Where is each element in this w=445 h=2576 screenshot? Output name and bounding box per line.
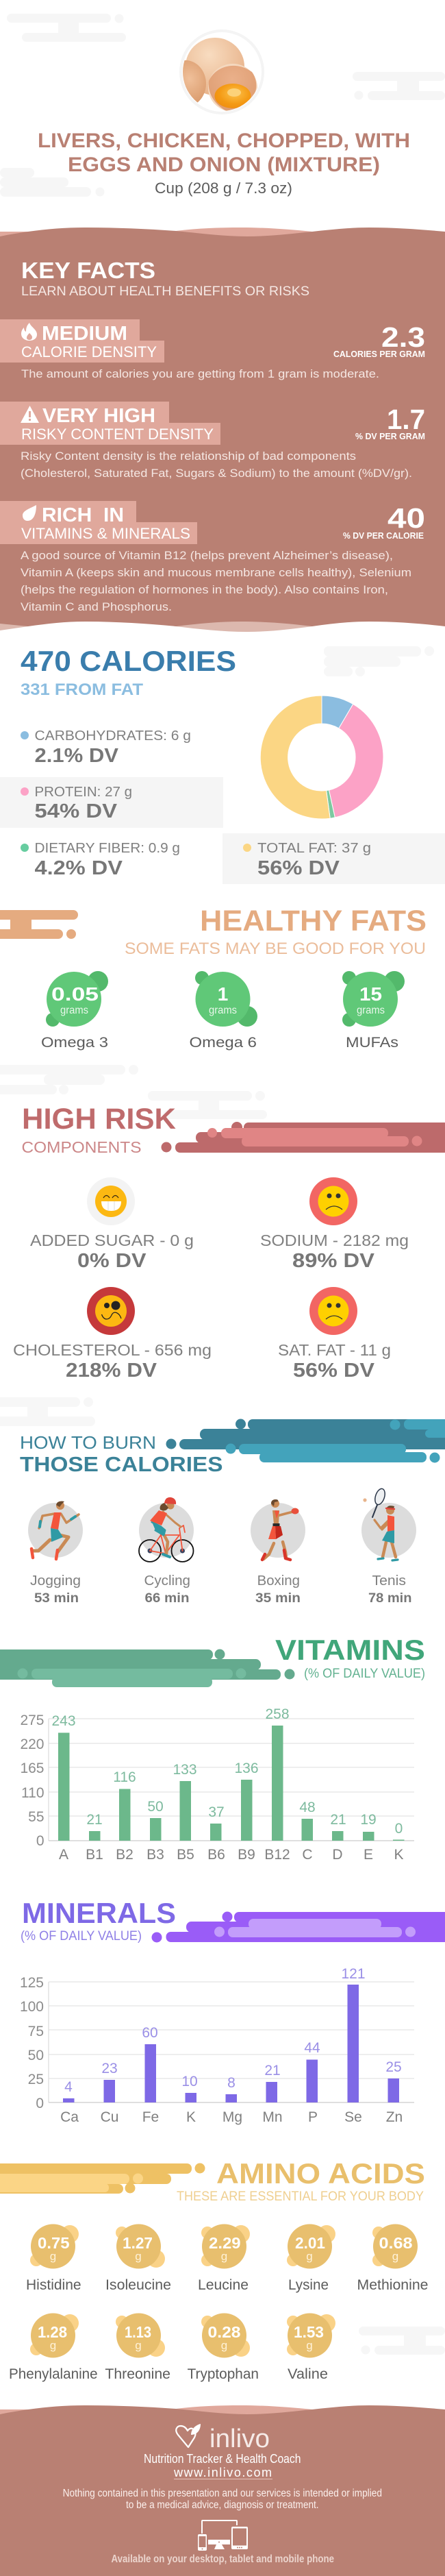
value labels: 136	[234, 1761, 259, 1776]
sub heading: THESE ARE ESSENTIAL FOR YOUR BODY	[177, 2189, 424, 2204]
banner shape	[162, 1122, 445, 1153]
y axis labels: 220	[20, 1737, 44, 1752]
logo: heart and leaf	[176, 2424, 201, 2447]
disclaimer	[63, 2488, 382, 2511]
fact: risky content density: % DV PER GRAM	[355, 432, 425, 441]
infographic canvas: 78 min	[368, 1591, 412, 1606]
value labels: 21	[86, 1812, 103, 1828]
y axis labels: 0	[36, 1833, 44, 1849]
value labels: 23	[101, 2061, 118, 2076]
disclaimer: to be a medical advice, diagnosis or treatment.	[126, 2499, 319, 2511]
bubble: phenylalanine	[9, 2314, 98, 2382]
heading: MINERALS	[22, 1897, 176, 1929]
icon: cyclist	[139, 1497, 193, 1562]
fact: vitamins and minerals: Vitamin A (keeps skin and mucous membrane cells healthy), Selenium	[21, 567, 411, 579]
activity: tennis	[361, 1488, 416, 1560]
heading	[20, 1432, 223, 1476]
bubble: tryptophan: Tryptophan	[188, 2366, 259, 2382]
infographic canvas: Boxing	[257, 1573, 300, 1588]
fact: vitamins and minerals: 40	[387, 502, 425, 534]
fact: calorie density: MEDIUM	[42, 323, 127, 345]
value labels: 50	[147, 1799, 164, 1815]
sub heading: 331 FROM FAT	[21, 680, 143, 699]
bubble: threonine	[105, 2314, 170, 2382]
value labels: 25	[385, 2059, 402, 2075]
panel: healthy fats	[0, 905, 427, 1119]
x axis labels: D	[332, 1847, 343, 1863]
tagline: Nutrition Tracker & Health Coach	[144, 2452, 301, 2466]
y axis labels: 125	[20, 1975, 44, 1991]
infographic canvas: 35 min	[255, 1591, 301, 1606]
bar chart: minerals	[20, 1966, 414, 2125]
item: cholesterol: CHOLESTEROL - 656 mg	[13, 1341, 212, 1359]
x axis labels: B1	[86, 1847, 103, 1863]
item: saturated fat	[278, 1287, 391, 1382]
bubble: leucine	[198, 2224, 250, 2293]
panel: high risk	[13, 1103, 445, 1382]
bubble: omega 6: Omega 6	[189, 1035, 257, 1051]
gridlines	[49, 1719, 414, 1841]
bubble: histidine: g	[50, 2250, 56, 2263]
value labels: 116	[113, 1769, 136, 1785]
item: sodium	[260, 1177, 409, 1272]
x axis labels	[59, 1847, 404, 1863]
item: added sugar: ADDED SUGAR - 0 g	[30, 1231, 194, 1249]
item: sodium: SODIUM - 2182 mg	[260, 1231, 409, 1249]
panel: header	[0, 14, 445, 197]
item: saturated fat: 56% DV	[293, 1360, 375, 1382]
fact: calorie density: CALORIES PER GRAM	[333, 349, 425, 359]
bubble: MUFAs: MUFAs	[346, 1035, 398, 1051]
item: added sugar	[30, 1177, 194, 1272]
fact: calorie density: 2.3	[381, 321, 425, 353]
donut chart	[260, 696, 383, 819]
background cloud	[324, 646, 434, 676]
value labels: 48	[299, 1800, 316, 1815]
fact: vitamins and minerals: % DV PER CALORIE	[343, 531, 424, 541]
x axis labels: B12	[264, 1847, 290, 1863]
disclaimer: Nothing contained in this presentation and our services is intended or implied	[63, 2488, 382, 2499]
value labels	[64, 1966, 402, 2095]
legend: carbohydrates: CARBOHYDRATES: 6 g	[34, 728, 191, 744]
panel: amino acids	[0, 2157, 445, 2382]
bubble: histidine	[26, 2224, 81, 2293]
icon: sad face	[318, 1186, 349, 1217]
panel: vitamins	[0, 1634, 425, 1863]
x axis labels: Cu	[101, 2109, 118, 2125]
panel: key facts	[0, 228, 445, 632]
fact: risky content density	[0, 402, 425, 480]
x axis labels: Ca	[60, 2109, 79, 2125]
title	[38, 130, 410, 176]
value labels: 4	[64, 2079, 73, 2095]
bubble: lysine	[287, 2224, 335, 2293]
item: added sugar: 0% DV	[77, 1250, 147, 1272]
heading: KEY FACTS	[21, 258, 155, 283]
activity: jogging	[28, 1501, 83, 1559]
panel: burn calories: Jogging	[30, 1573, 81, 1588]
infographic canvas: Tenis	[372, 1573, 406, 1588]
bars	[63, 1985, 399, 2102]
heading: VITAMINS	[275, 1634, 425, 1666]
bubble: phenylalanine: Phenylalanine	[9, 2366, 98, 2382]
fact: vitamins and minerals: VITAMINS & MINERALS	[21, 525, 190, 542]
legend: dietary fiber: DIETARY FIBER: 0.9 g	[34, 841, 180, 856]
icon: warning triangle	[21, 406, 39, 423]
value labels: 37	[208, 1804, 225, 1820]
infographic canvas: Cycling	[144, 1573, 190, 1588]
heading: 470 CALORIES	[21, 645, 236, 677]
bubble: omega 3	[41, 971, 108, 1051]
icon: devices	[198, 2520, 248, 2551]
bubble: threonine: g	[135, 2339, 142, 2352]
value labels: 0	[395, 1821, 403, 1837]
legend: carbohydrates: 2.1% DV	[34, 745, 119, 767]
bubble: phenylalanine: g	[50, 2339, 56, 2352]
bubble: lysine: 2.01	[295, 2234, 325, 2252]
fact: risky content density: 1.7	[387, 404, 425, 435]
legend: dietary fiber: 4.2% DV	[34, 857, 123, 879]
fact: vitamins and minerals: RICH IN	[42, 504, 124, 526]
x axis labels: Zn	[386, 2109, 403, 2125]
heading: HOW TO BURN	[20, 1432, 156, 1453]
bubble: leucine: 2.29	[209, 2234, 241, 2252]
icon: leaf	[23, 505, 36, 521]
value labels	[51, 1706, 403, 1837]
heading: LEARN ABOUT HEALTH BENEFITS OR RISKS	[21, 284, 309, 299]
banner shape	[0, 910, 78, 939]
x axis labels: B9	[238, 1847, 255, 1863]
legend: protein	[21, 785, 132, 822]
bubble: omega 3: Omega 3	[41, 1035, 108, 1051]
availability note: Available on your desktop, tablet and mobile phone	[111, 2553, 334, 2565]
wave edge	[0, 2405, 445, 2576]
activity: cycling	[139, 1497, 194, 1562]
bubble: tryptophan: g	[221, 2339, 227, 2352]
y axis labels: 25	[28, 2072, 44, 2087]
banner shape	[166, 1419, 445, 1462]
legend: total fat: TOTAL FAT: 37 g	[257, 841, 371, 856]
x axis labels: Mn	[262, 2109, 283, 2125]
bubble: omega 6	[189, 971, 257, 1051]
legend highlight boxes	[0, 777, 445, 884]
legend: total fat	[243, 841, 371, 879]
y axis labels: 50	[28, 2048, 44, 2063]
legend: protein: 54% DV	[34, 800, 118, 822]
bubble: tryptophan	[188, 2314, 259, 2382]
value labels: 10	[181, 2074, 198, 2089]
bubble: MUFAs: 15	[359, 983, 382, 1005]
bars	[58, 1726, 404, 1841]
x axis labels: Fe	[142, 2109, 159, 2125]
legend: total fat: 56% DV	[257, 857, 340, 879]
fact: risky content density: VERY HIGH	[42, 405, 155, 427]
x axis labels: Se	[344, 2109, 362, 2125]
y axis labels: 275	[20, 1713, 44, 1728]
y axis labels: 100	[20, 1999, 44, 2015]
infographic canvas: 66 min	[145, 1591, 189, 1606]
panel: burn calories	[0, 1397, 445, 1606]
bubble: histidine: 0.75	[38, 2234, 70, 2252]
item: sodium: 89% DV	[292, 1250, 375, 1272]
title: EGGS AND ONION (MIXTURE)	[68, 154, 380, 176]
bubble: omega 6: grams	[209, 1005, 237, 1016]
bubble: leucine: g	[221, 2250, 227, 2263]
sub heading: SOME FATS MAY BE GOOD FOR YOU	[125, 940, 426, 958]
heading	[21, 258, 309, 299]
bubble: omega 3: 0.05	[51, 983, 99, 1005]
icon: sad face	[318, 1295, 349, 1327]
title: LIVERS, CHICKEN, CHOPPED, WITH	[38, 130, 410, 152]
item: saturated fat: SAT. FAT - 11 g	[278, 1341, 391, 1359]
bubble: valine: 1.53	[294, 2323, 324, 2341]
background clouds	[0, 14, 445, 197]
legend: protein: PROTEIN: 27 g	[34, 785, 132, 800]
background clouds	[0, 1065, 267, 1119]
value labels: 19	[360, 1812, 377, 1828]
brand name: inlivo	[209, 2425, 270, 2453]
icon: boxer	[262, 1499, 298, 1560]
value labels: 21	[264, 2063, 281, 2078]
photo: eggs	[179, 29, 264, 114]
bubble: isoleucine	[105, 2224, 171, 2293]
bubble: MUFAs: grams	[357, 1005, 385, 1016]
heading: THOSE CALORIES	[20, 1452, 223, 1476]
banner shape	[0, 1649, 294, 1687]
bubble: methionine: Methionine	[357, 2277, 429, 2293]
bubble: isoleucine: Isoleucine	[105, 2277, 171, 2293]
legend: carbohydrates	[21, 728, 191, 767]
y axis labels: 165	[20, 1761, 44, 1776]
y axis labels	[20, 1975, 44, 2111]
activity: boxing	[251, 1499, 305, 1560]
serving size: Cup (208 g / 7.3 oz)	[155, 180, 292, 197]
value labels: 121	[341, 1966, 366, 1982]
sub heading: COMPONENTS	[22, 1138, 141, 1156]
icon: grinning face	[95, 1186, 127, 1217]
banner shape	[0, 2163, 205, 2194]
item: cholesterol	[13, 1287, 212, 1382]
x axis labels: P	[308, 2109, 318, 2125]
value labels: 60	[142, 2025, 158, 2041]
value labels: 21	[330, 1812, 346, 1828]
bubble: lysine: g	[306, 2250, 313, 2263]
fact: calorie density: CALORIE DENSITY	[21, 343, 157, 360]
heading: HEALTHY FATS	[200, 905, 427, 937]
website: www.inlivo.com	[173, 2466, 272, 2479]
sub heading: (% OF DAILY VALUE)	[304, 1667, 425, 1681]
panel: footer	[0, 2405, 445, 2576]
banner shape	[152, 1912, 445, 1942]
x axis labels: B5	[177, 1847, 194, 1863]
background cloud	[359, 2327, 445, 2355]
bubble: lysine: Lysine	[288, 2277, 329, 2293]
icon: tennis player	[363, 1488, 398, 1560]
bubble: omega 6: 1	[218, 983, 228, 1005]
fact: vitamins and minerals	[0, 501, 425, 613]
gridlines	[49, 1982, 414, 2102]
bubble: valine: Valine	[288, 2366, 328, 2382]
fact: risky content density: RISKY CONTENT DENSITY	[21, 426, 214, 443]
fact: risky content density: (Cholesterol, Saturated Fat, Sugars & Sodium) to the amount (%DV/gr).	[21, 467, 412, 480]
heading: AMINO ACIDS	[216, 2157, 425, 2189]
value labels: 133	[173, 1762, 197, 1778]
fact: risky content density: Risky Content density is the relationship of bad components	[21, 450, 356, 463]
bubble: methionine	[357, 2224, 429, 2293]
bubble: threonine: 1.13	[125, 2323, 151, 2341]
item: cholesterol: 218% DV	[66, 1360, 157, 1382]
y axis labels	[20, 1713, 44, 1849]
fact: vitamins and minerals: (helps the regulation of hormones in the body). Also contains Iron,	[21, 584, 388, 596]
fact: vitamins and minerals: Vitamin C and Phosphorus.	[21, 601, 172, 613]
icon: sick face	[95, 1295, 127, 1327]
x axis labels: K	[186, 2109, 196, 2125]
panel: minerals	[20, 1897, 445, 2125]
value labels: 44	[304, 2040, 320, 2056]
wave edges	[0, 228, 445, 632]
bubble: methionine: 0.68	[379, 2234, 413, 2252]
fact: calorie density: The amount of calories you are getting from 1 gram is moderate.	[21, 368, 379, 380]
x axis labels: B3	[147, 1847, 164, 1863]
legend: dietary fiber	[21, 841, 180, 879]
bubble: methionine: g	[392, 2250, 398, 2263]
x axis labels: K	[394, 1847, 404, 1863]
x axis labels	[60, 2109, 403, 2125]
y axis labels: 110	[21, 1785, 44, 1801]
icon: flame	[21, 323, 37, 341]
panel: calories	[0, 645, 445, 884]
value labels: 243	[51, 1713, 76, 1729]
bubble: phenylalanine: 1.28	[38, 2323, 67, 2341]
fact: calorie density	[0, 319, 425, 380]
x axis labels: E	[364, 1847, 373, 1863]
fact: vitamins and minerals: A good source of Vitamin B12 (helps prevent Alzheimer’s disease),	[21, 550, 393, 562]
icon: runner	[31, 1501, 79, 1559]
heading: HIGH RISK	[22, 1103, 176, 1136]
bubble: histidine: Histidine	[26, 2277, 81, 2293]
bubble: valine	[287, 2314, 335, 2382]
bubble: threonine: Threonine	[105, 2366, 170, 2382]
bubble: isoleucine: 1.27	[123, 2234, 153, 2252]
value labels: 8	[227, 2075, 236, 2091]
bar chart: vitamins	[20, 1706, 414, 1863]
y axis labels: 0	[36, 2096, 44, 2111]
panel: burn calories: 53 min	[34, 1591, 79, 1606]
x axis labels: B2	[116, 1847, 134, 1863]
sub heading: (% OF DAILY VALUE)	[21, 1929, 142, 1943]
y axis labels: 55	[28, 1809, 44, 1825]
x axis labels: C	[302, 1847, 313, 1863]
x axis labels: Mg	[222, 2109, 242, 2125]
x axis labels: B6	[207, 1847, 225, 1863]
bubble: leucine: Leucine	[198, 2277, 249, 2293]
bubble: valine: g	[306, 2339, 313, 2352]
bubble: tryptophan: 0.28	[208, 2323, 241, 2341]
background cloud	[0, 1397, 95, 1426]
bubble: isoleucine: g	[135, 2250, 142, 2263]
y axis labels: 75	[28, 2024, 44, 2039]
bubble: omega 3: grams	[60, 1005, 88, 1016]
value labels: 258	[265, 1706, 290, 1722]
bubble: MUFAs	[342, 971, 405, 1051]
x axis labels: A	[59, 1847, 68, 1863]
